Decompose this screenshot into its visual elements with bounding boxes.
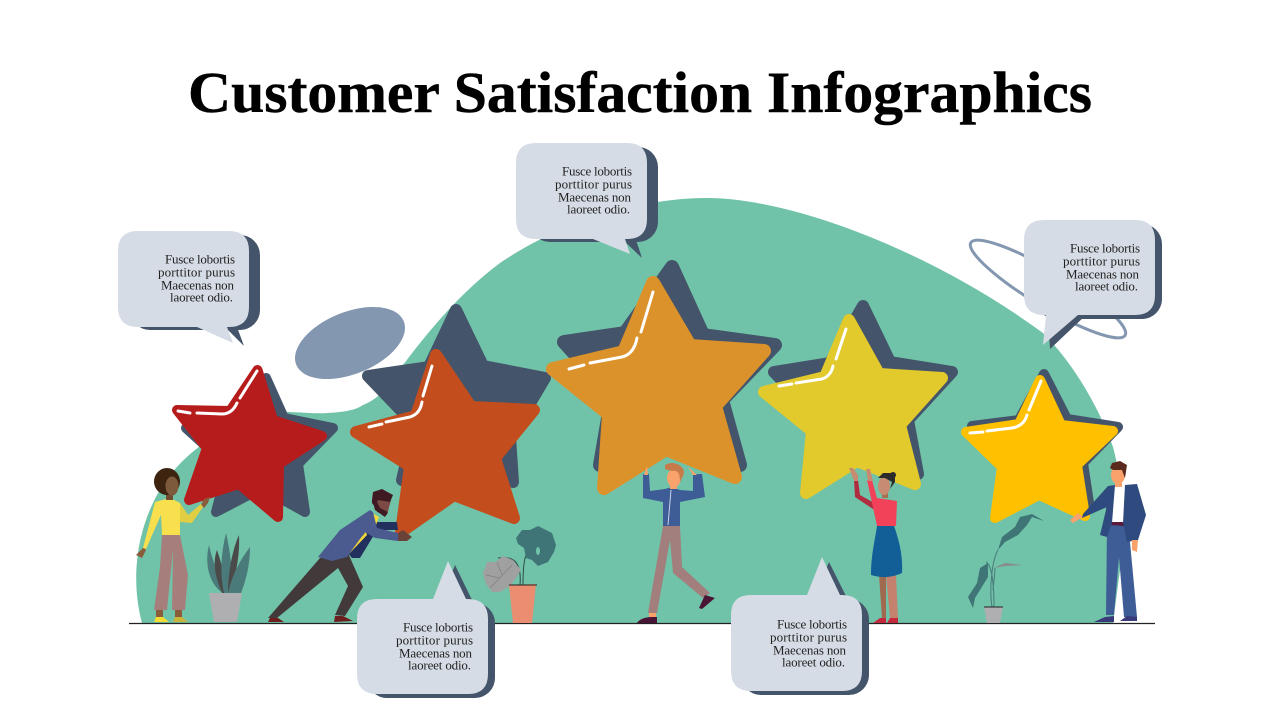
speech bubble: top right bbox=[1024, 220, 1162, 349]
speech bubble: top left: Maecenas non bbox=[161, 278, 234, 293]
figure: man lifting amber star bbox=[637, 463, 715, 623]
speech bubble: bottom right: Maecenas non bbox=[773, 643, 846, 658]
title: Customer Satisfaction Infographics bbox=[188, 60, 1092, 125]
ring outline bbox=[962, 227, 1134, 351]
speech bubble: top right: Fusce lobortis bbox=[1070, 241, 1140, 256]
speech bubble: top right: porttitor purus bbox=[1063, 254, 1140, 269]
plant: leafy stem in small pot bbox=[968, 514, 1044, 623]
figure: woman in yellow bbox=[136, 468, 210, 622]
speech bubble: bottom right: laoreet odio. bbox=[782, 655, 845, 670]
speech bubble: top right: laoreet odio. bbox=[1075, 279, 1138, 294]
star 4: mustard yellow bbox=[764, 306, 952, 493]
speech bubble: top centre: Maecenas non bbox=[558, 190, 632, 205]
speech bubble: top centre bbox=[516, 143, 658, 258]
speech bubble: top left: porttitor purus bbox=[158, 265, 235, 280]
speech bubble: bottom left: laoreet odio. bbox=[408, 658, 471, 673]
green background hill bbox=[136, 198, 1123, 623]
plant: monstera in terracotta pot bbox=[483, 526, 556, 623]
grey ellipse bbox=[285, 293, 415, 393]
speech bubble: top centre: porttitor purus bbox=[555, 177, 632, 192]
figure: man in navy suit bbox=[1070, 461, 1146, 622]
star 1: red bbox=[177, 370, 333, 517]
speech bubble: bottom left: Fusce lobortis bbox=[403, 620, 473, 635]
star 5: golden yellow bbox=[966, 374, 1118, 518]
speech bubble: bottom left bbox=[357, 561, 495, 698]
speech bubble: top left: laoreet odio. bbox=[170, 290, 233, 305]
star 2: orange-red bbox=[356, 310, 545, 532]
speech bubble: top left: Fusce lobortis bbox=[165, 252, 235, 267]
ground line bbox=[129, 622, 1155, 624]
speech bubble: top centre: Fusce lobortis bbox=[562, 164, 632, 179]
speech bubble: top left bbox=[118, 231, 260, 346]
figure: woman in red top bbox=[849, 468, 902, 623]
speech bubble: bottom right: Fusce lobortis bbox=[777, 617, 847, 632]
speech bubble: bottom left: porttitor purus bbox=[396, 633, 473, 648]
speech bubble: top centre: laoreet odio. bbox=[567, 202, 630, 217]
plant: spiky leaves in grey pot bbox=[207, 533, 250, 622]
figure: man pushing star bbox=[268, 489, 412, 622]
speech bubble: top right: Maecenas non bbox=[1066, 267, 1140, 282]
speech bubble: bottom right: porttitor purus bbox=[770, 630, 847, 645]
speech bubble: bottom right bbox=[731, 557, 869, 695]
star 3: amber bbox=[553, 267, 775, 488]
speech bubble: bottom left: Maecenas non bbox=[399, 646, 472, 661]
